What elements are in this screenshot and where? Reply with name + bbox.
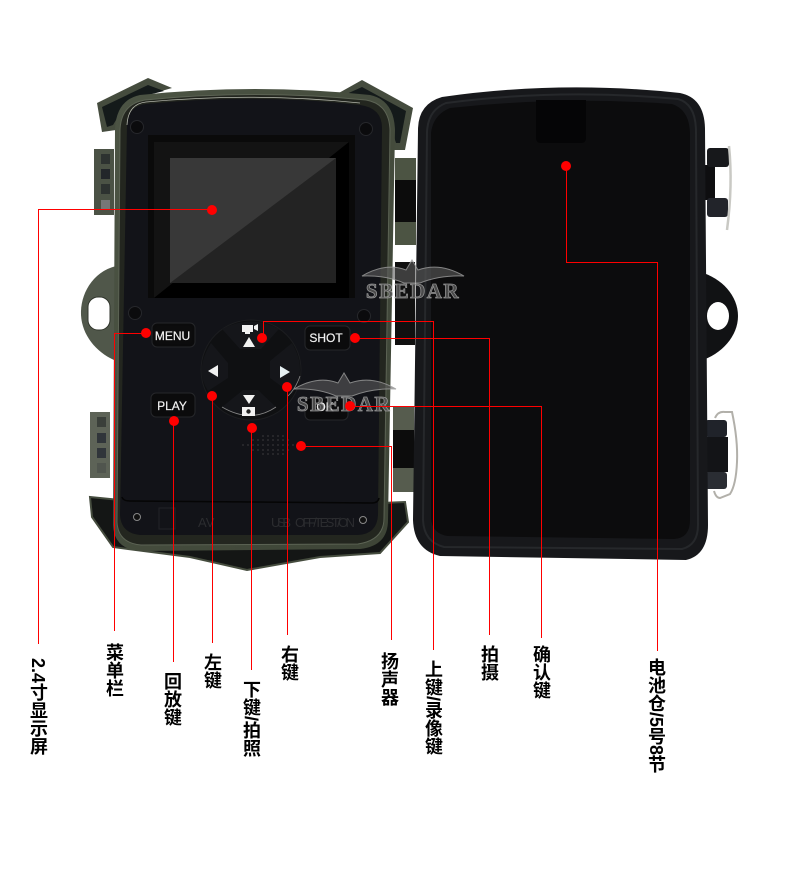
MENU button: MENU — [155, 329, 190, 343]
label: up key: 上键/录像键 — [423, 660, 443, 755]
panel highlight — [127, 97, 360, 125]
left arrow — [208, 365, 218, 377]
mount ear — [81, 266, 116, 360]
right mount ear — [700, 272, 738, 361]
label: screen: 2.4寸显示屏 — [28, 658, 48, 755]
watermark 2: SBEDAR — [297, 392, 391, 416]
camera back cover — [413, 87, 738, 560]
lower side clip — [90, 412, 110, 478]
label: down key: 下键/拍照 — [241, 680, 261, 757]
PLAY button — [151, 393, 195, 417]
callout: up — [257, 322, 434, 650]
lid interior — [431, 101, 690, 539]
label: shoot: 拍摄 — [479, 645, 499, 681]
watermark 2 — [294, 373, 396, 416]
label: left key: 左键 — [202, 653, 222, 689]
lid shell — [413, 87, 708, 560]
callout: battery — [561, 161, 658, 651]
port labels: AV — [198, 515, 215, 530]
corner holes — [128, 120, 372, 322]
OK button — [305, 398, 348, 420]
label: menu: 菜单栏 — [104, 643, 124, 697]
MENU button — [152, 323, 195, 347]
hinges — [393, 158, 416, 492]
up icon: video — [242, 324, 258, 347]
callout: down — [247, 423, 257, 670]
left top ear — [97, 78, 172, 132]
watermark 1 — [362, 260, 464, 303]
PLAY button: PLAY — [157, 399, 187, 413]
direction pad — [201, 320, 301, 420]
callout: shot — [350, 333, 490, 635]
lower right hinge — [703, 412, 737, 498]
SHOT button: SHOT — [309, 331, 343, 345]
screen — [170, 158, 336, 283]
callout: play — [169, 416, 179, 662]
callout: ok — [345, 401, 542, 638]
speaker holes — [242, 435, 294, 455]
upper side clip — [94, 149, 114, 215]
label: play: 回放键 — [162, 672, 182, 726]
screws — [134, 514, 366, 524]
usb label: USB — [271, 515, 291, 530]
down icon: camera — [242, 395, 255, 416]
watermark 1: SBEDAR — [366, 279, 460, 303]
camera front body — [81, 78, 416, 570]
label: speaker: 扬声器 — [379, 652, 399, 706]
SHOT button — [305, 326, 350, 350]
right top ear — [337, 80, 413, 150]
bottom flange — [90, 497, 408, 570]
right arrow — [280, 366, 290, 378]
switch label: OFF/TEST/ON — [295, 515, 355, 530]
USB icon mark — [159, 508, 175, 529]
label: right key: 右键 — [279, 645, 299, 681]
callout: left — [207, 391, 217, 643]
callout: speaker — [296, 441, 392, 640]
black panel — [120, 99, 382, 535]
label: battery: 电池仓/5号8节 — [646, 658, 666, 773]
label: confirm: 确认键 — [531, 645, 551, 699]
OK button: OK — [316, 400, 334, 414]
lid gasket — [423, 94, 698, 549]
callout: right — [282, 382, 292, 635]
upper right hinge — [703, 146, 731, 230]
callout: menu — [114, 328, 151, 631]
screen bezel — [148, 135, 355, 298]
callout: screen — [38, 205, 217, 644]
green frame — [113, 89, 395, 551]
battery notch — [536, 100, 586, 143]
